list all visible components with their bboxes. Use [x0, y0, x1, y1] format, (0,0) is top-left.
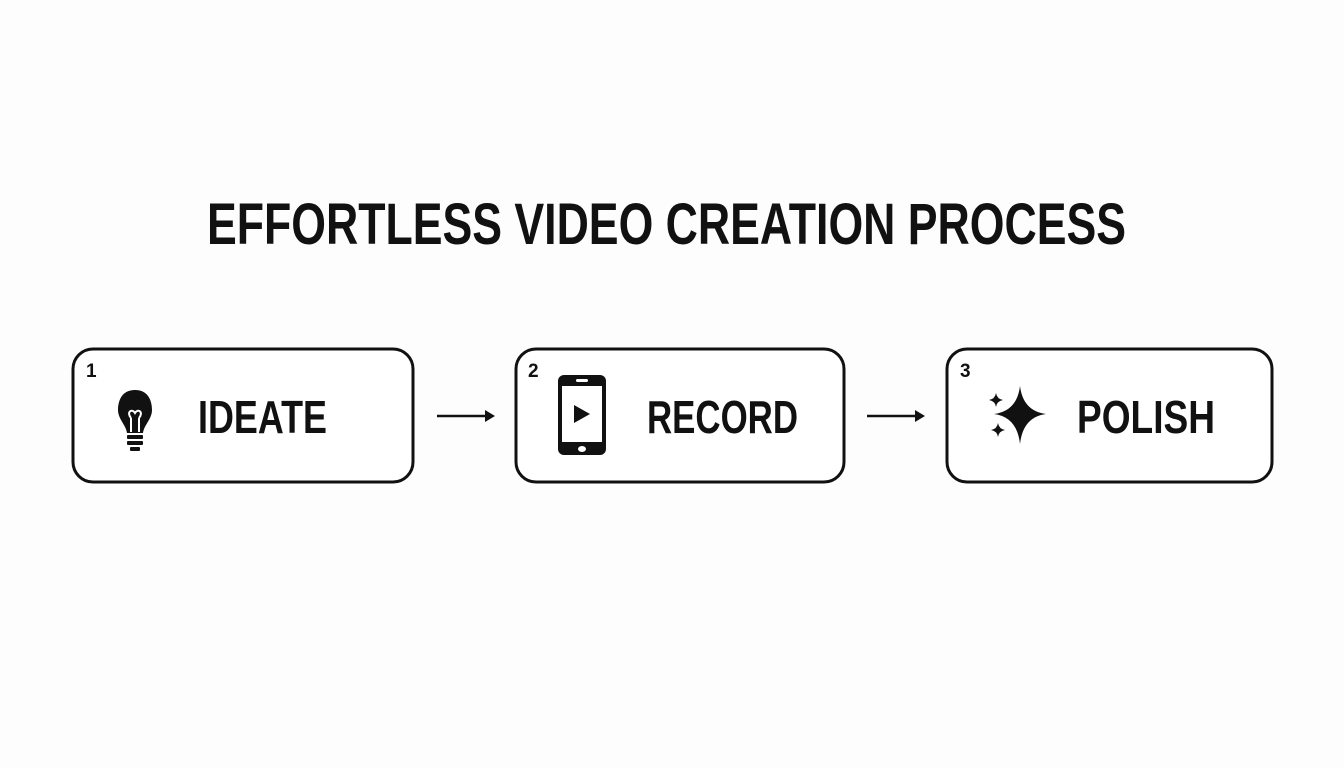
- arrow 1: [437, 410, 495, 422]
- step number 2: 2: [528, 361, 539, 382]
- panel: step 1 ideate: [73, 349, 413, 482]
- icon: light bulb: [118, 390, 152, 451]
- panel: step 3 polish: [947, 349, 1272, 482]
- step number 1: 1: [86, 361, 97, 382]
- step number 3: 3: [960, 361, 971, 382]
- panel: step 2 record: [516, 349, 844, 482]
- label: POLISH: POLISH: [1077, 391, 1215, 443]
- icon: sparkles: [989, 386, 1046, 444]
- arrow 2: [867, 410, 925, 422]
- label: RECORD: RECORD: [647, 391, 798, 443]
- icon: phone with play: [558, 375, 606, 455]
- label: IDEATE: IDEATE: [198, 391, 327, 443]
